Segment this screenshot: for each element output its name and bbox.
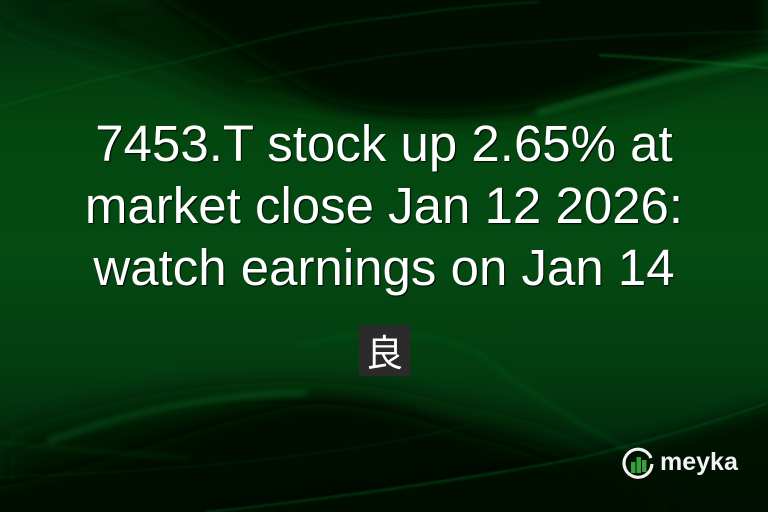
logo ring: [624, 449, 652, 477]
title: 7453.T stock up 2.65% at: [95, 115, 673, 172]
title: [85, 115, 683, 297]
title: market close Jan 12 2026:: [85, 177, 683, 234]
ticker icon tile: [359, 325, 410, 376]
meyka logo: [622, 448, 739, 479]
logo bars: [631, 457, 646, 473]
title: watch earnings on Jan 14: [93, 239, 675, 296]
logo wordmark: meyka: [660, 448, 739, 476]
ticker icon tile: 良: [366, 323, 403, 377]
